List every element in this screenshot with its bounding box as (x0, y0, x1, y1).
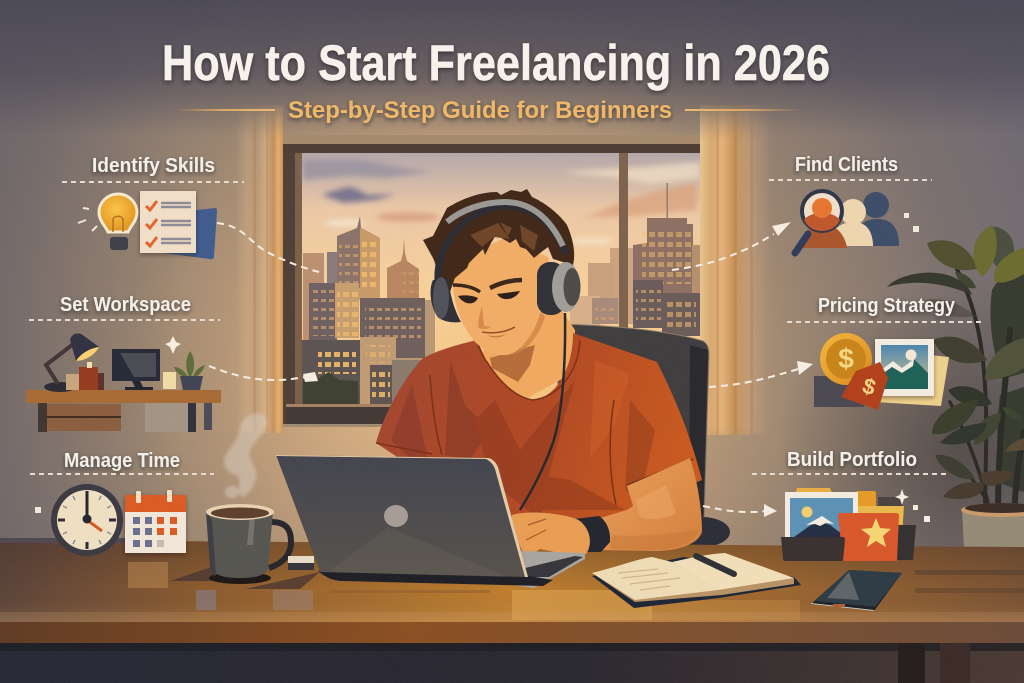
icon: sparkle (165, 336, 181, 354)
mullion (619, 153, 628, 405)
mug shadow (209, 572, 271, 584)
icon: price tag (841, 362, 888, 410)
t-shirt (376, 333, 702, 536)
heading: build portfolio: Build Portfolio (787, 449, 917, 471)
icon: checklist (140, 191, 196, 253)
eyes and brows (453, 280, 522, 303)
icon: monitor (112, 349, 160, 390)
mug body (206, 512, 273, 578)
plant right (887, 225, 1024, 547)
icon: calendar (125, 490, 186, 553)
icon: price tag: $ (859, 373, 879, 400)
step: identify skills (62, 155, 244, 259)
icon: magnifier (795, 191, 842, 253)
curtains (235, 105, 775, 435)
person (376, 189, 702, 558)
icon: clients group (803, 192, 899, 248)
steam (224, 414, 267, 498)
pen (696, 556, 734, 574)
shirt shading (391, 360, 655, 520)
city left (302, 216, 435, 404)
shirt seams (376, 340, 693, 505)
step: build portfolio (752, 449, 946, 561)
audio cable (520, 313, 565, 510)
icon: pages (875, 350, 949, 406)
icon: coin (820, 333, 872, 385)
icon: photo (875, 339, 934, 396)
laptop logo (384, 505, 408, 527)
clouds (303, 160, 700, 245)
icon: portfolio photo (785, 492, 858, 542)
icon: light bulb (78, 194, 137, 250)
right arm (600, 458, 702, 551)
hair (423, 189, 574, 302)
plant stems (950, 265, 1024, 512)
step: pricing strategy (787, 295, 984, 410)
step: find clients (769, 154, 932, 253)
phone (811, 570, 902, 611)
icon: holder front (781, 537, 845, 561)
sky (302, 153, 700, 405)
icon: clock (51, 484, 123, 556)
step: manage time (30, 450, 214, 556)
notebook (592, 553, 801, 608)
nose and mouth (478, 306, 491, 329)
sill (286, 405, 416, 424)
step: set workspace (26, 294, 221, 432)
stray eraser (288, 556, 314, 570)
window with city view (280, 135, 711, 427)
plant leaves (887, 225, 1024, 499)
icon: orange folder (838, 513, 899, 561)
heading: find clients: Find Clients (795, 154, 898, 176)
dashed connector arrows (209, 222, 813, 517)
icon: sparkles (895, 489, 930, 522)
hand (508, 513, 590, 558)
neck (480, 300, 575, 402)
icon: desk lamp (44, 333, 99, 392)
icon: blue card (163, 208, 217, 259)
heading: identify skills: Identify Skills (92, 155, 215, 177)
icon: small desk (26, 390, 221, 432)
headphones (431, 202, 580, 322)
under desk (0, 643, 1024, 683)
heading: set workspace: Set Workspace (60, 294, 191, 316)
heading: pricing strategy: Pricing Strategy (818, 295, 956, 317)
icon: coin: $ (838, 343, 854, 374)
chair (557, 324, 730, 547)
icon: holder right (894, 525, 916, 560)
plant pot (962, 510, 1024, 547)
desk reflections (0, 562, 1024, 622)
icon: small plant (174, 351, 205, 390)
plant dark mass (990, 258, 1024, 492)
icon: candle mug (163, 372, 176, 389)
mug handle (269, 522, 291, 568)
desk (0, 538, 1024, 683)
laptop (276, 455, 585, 588)
icon: stack (814, 376, 864, 407)
icon: books (66, 362, 104, 390)
city right (570, 183, 701, 336)
title: How to Start Freelancing in 2026 (162, 35, 830, 91)
coffee mug (206, 504, 314, 584)
heading: manage time: Manage Time (64, 450, 180, 472)
face (452, 236, 549, 355)
watch (574, 516, 610, 552)
subtitle: Step-by-Step Guide for Beginners (288, 97, 672, 124)
icon: folder tabs (795, 488, 904, 551)
